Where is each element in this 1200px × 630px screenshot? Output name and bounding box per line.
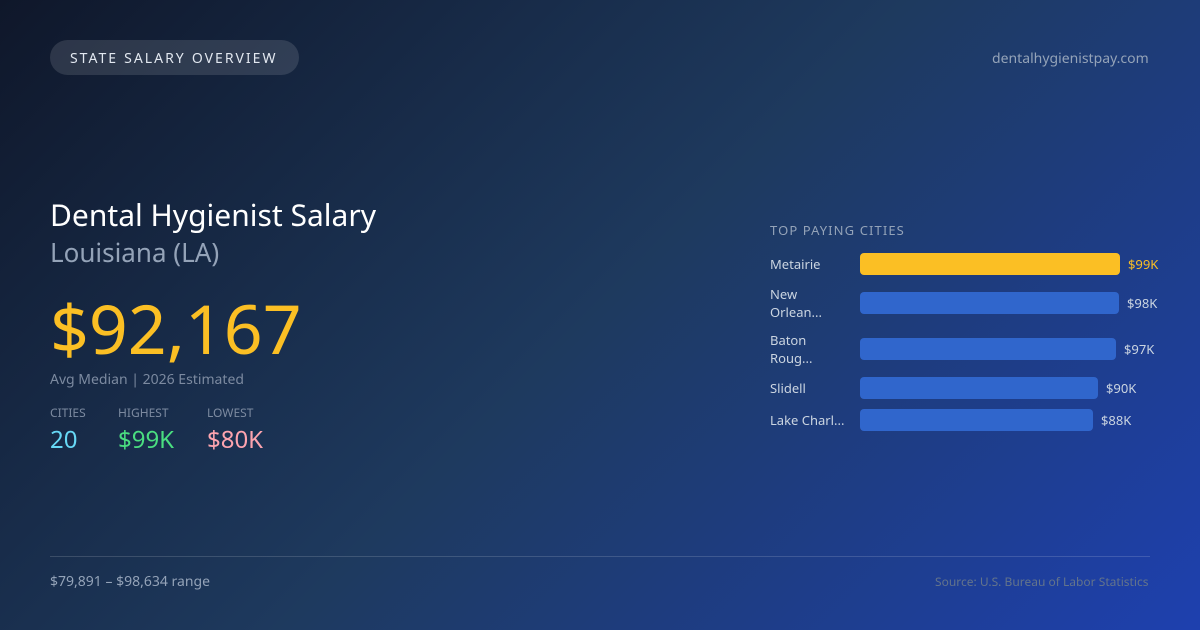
- site domain: dentalhygienistpay.com: [992, 49, 1149, 68]
- city label: Baton: [770, 331, 806, 349]
- salary range: $79,891 – $98,634 range: [50, 572, 210, 591]
- stat: cities: [50, 404, 86, 456]
- bar: [860, 292, 1119, 314]
- row: Baton Rouge: [770, 331, 1154, 367]
- city label: Roug...: [770, 349, 812, 367]
- city label: Lake Charl...: [770, 411, 844, 429]
- row: New Orleans: [770, 285, 1158, 321]
- stat value: $99K: [118, 423, 174, 456]
- stat: highest: [118, 404, 174, 456]
- stat: lowest: [207, 404, 263, 456]
- row: Metairie: [770, 253, 1158, 275]
- city label: Orlean...: [770, 303, 822, 321]
- stat label: LOWEST: [207, 404, 253, 421]
- bar: [860, 338, 1116, 360]
- stat value: 20: [50, 423, 77, 456]
- value: $97K: [1124, 340, 1154, 358]
- stat label: CITIES: [50, 404, 86, 421]
- city label: New: [770, 285, 797, 303]
- city label: [770, 285, 822, 321]
- bar: [860, 253, 1120, 275]
- badge text: STATE SALARY OVERVIEW: [70, 49, 278, 68]
- city label: Slidell: [770, 379, 806, 397]
- row: Lake Charles: [770, 409, 1132, 431]
- source note: Source: U.S. Bureau of Labor Statistics: [935, 573, 1148, 590]
- value: $99K: [1128, 255, 1158, 273]
- bar: [860, 377, 1098, 399]
- city label: Metairie: [770, 255, 821, 273]
- salary caption: Avg Median | 2026 Estimated: [50, 370, 244, 389]
- row: Slidell: [770, 377, 1136, 399]
- chart heading: TOP PAYING CITIES: [770, 221, 905, 239]
- title: Dental Hygienist Salary: [50, 194, 376, 235]
- value: $98K: [1127, 294, 1157, 312]
- stat value: $80K: [207, 423, 263, 456]
- bar: [860, 409, 1093, 431]
- badge: state salary overview: [50, 40, 299, 75]
- city label: [770, 331, 812, 367]
- main salary figure: $92,167: [50, 281, 302, 374]
- subtitle: state: Louisiana (LA): [50, 234, 219, 270]
- stat label: HIGHEST: [118, 404, 169, 421]
- value: $88K: [1101, 411, 1131, 429]
- value: $90K: [1106, 379, 1136, 397]
